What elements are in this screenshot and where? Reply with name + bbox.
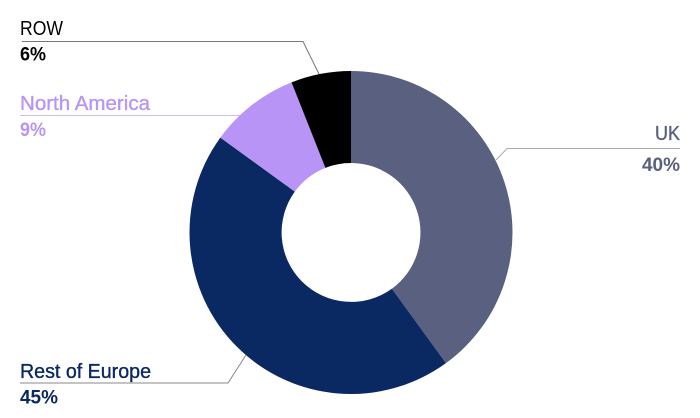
segment: Rest of Europe 45% bbox=[190, 138, 446, 394]
label: ROW 6% bbox=[20, 18, 319, 74]
label: Rest of Europe 45% bbox=[20, 355, 246, 408]
segment: UK 40% bbox=[351, 71, 512, 363]
label: UK 40% bbox=[496, 123, 681, 176]
segment: ROW 6% bbox=[292, 71, 351, 168]
segment: North America 9% bbox=[220, 82, 325, 192]
label: UK 40%: 40% bbox=[642, 155, 680, 176]
label: North America 9%: North America bbox=[20, 93, 151, 115]
label: UK 40%: UK bbox=[655, 123, 681, 145]
label: ROW 6%: ROW bbox=[20, 18, 63, 40]
label: North America 9% bbox=[20, 93, 240, 141]
label: Rest of Europe 45%: Rest of Europe bbox=[20, 361, 151, 383]
label: ROW 6%: 6% bbox=[20, 44, 46, 66]
label: Rest of Europe 45%: 45% bbox=[20, 388, 58, 408]
label: North America 9%: 9% bbox=[20, 120, 46, 141]
donut chart bbox=[190, 71, 512, 394]
